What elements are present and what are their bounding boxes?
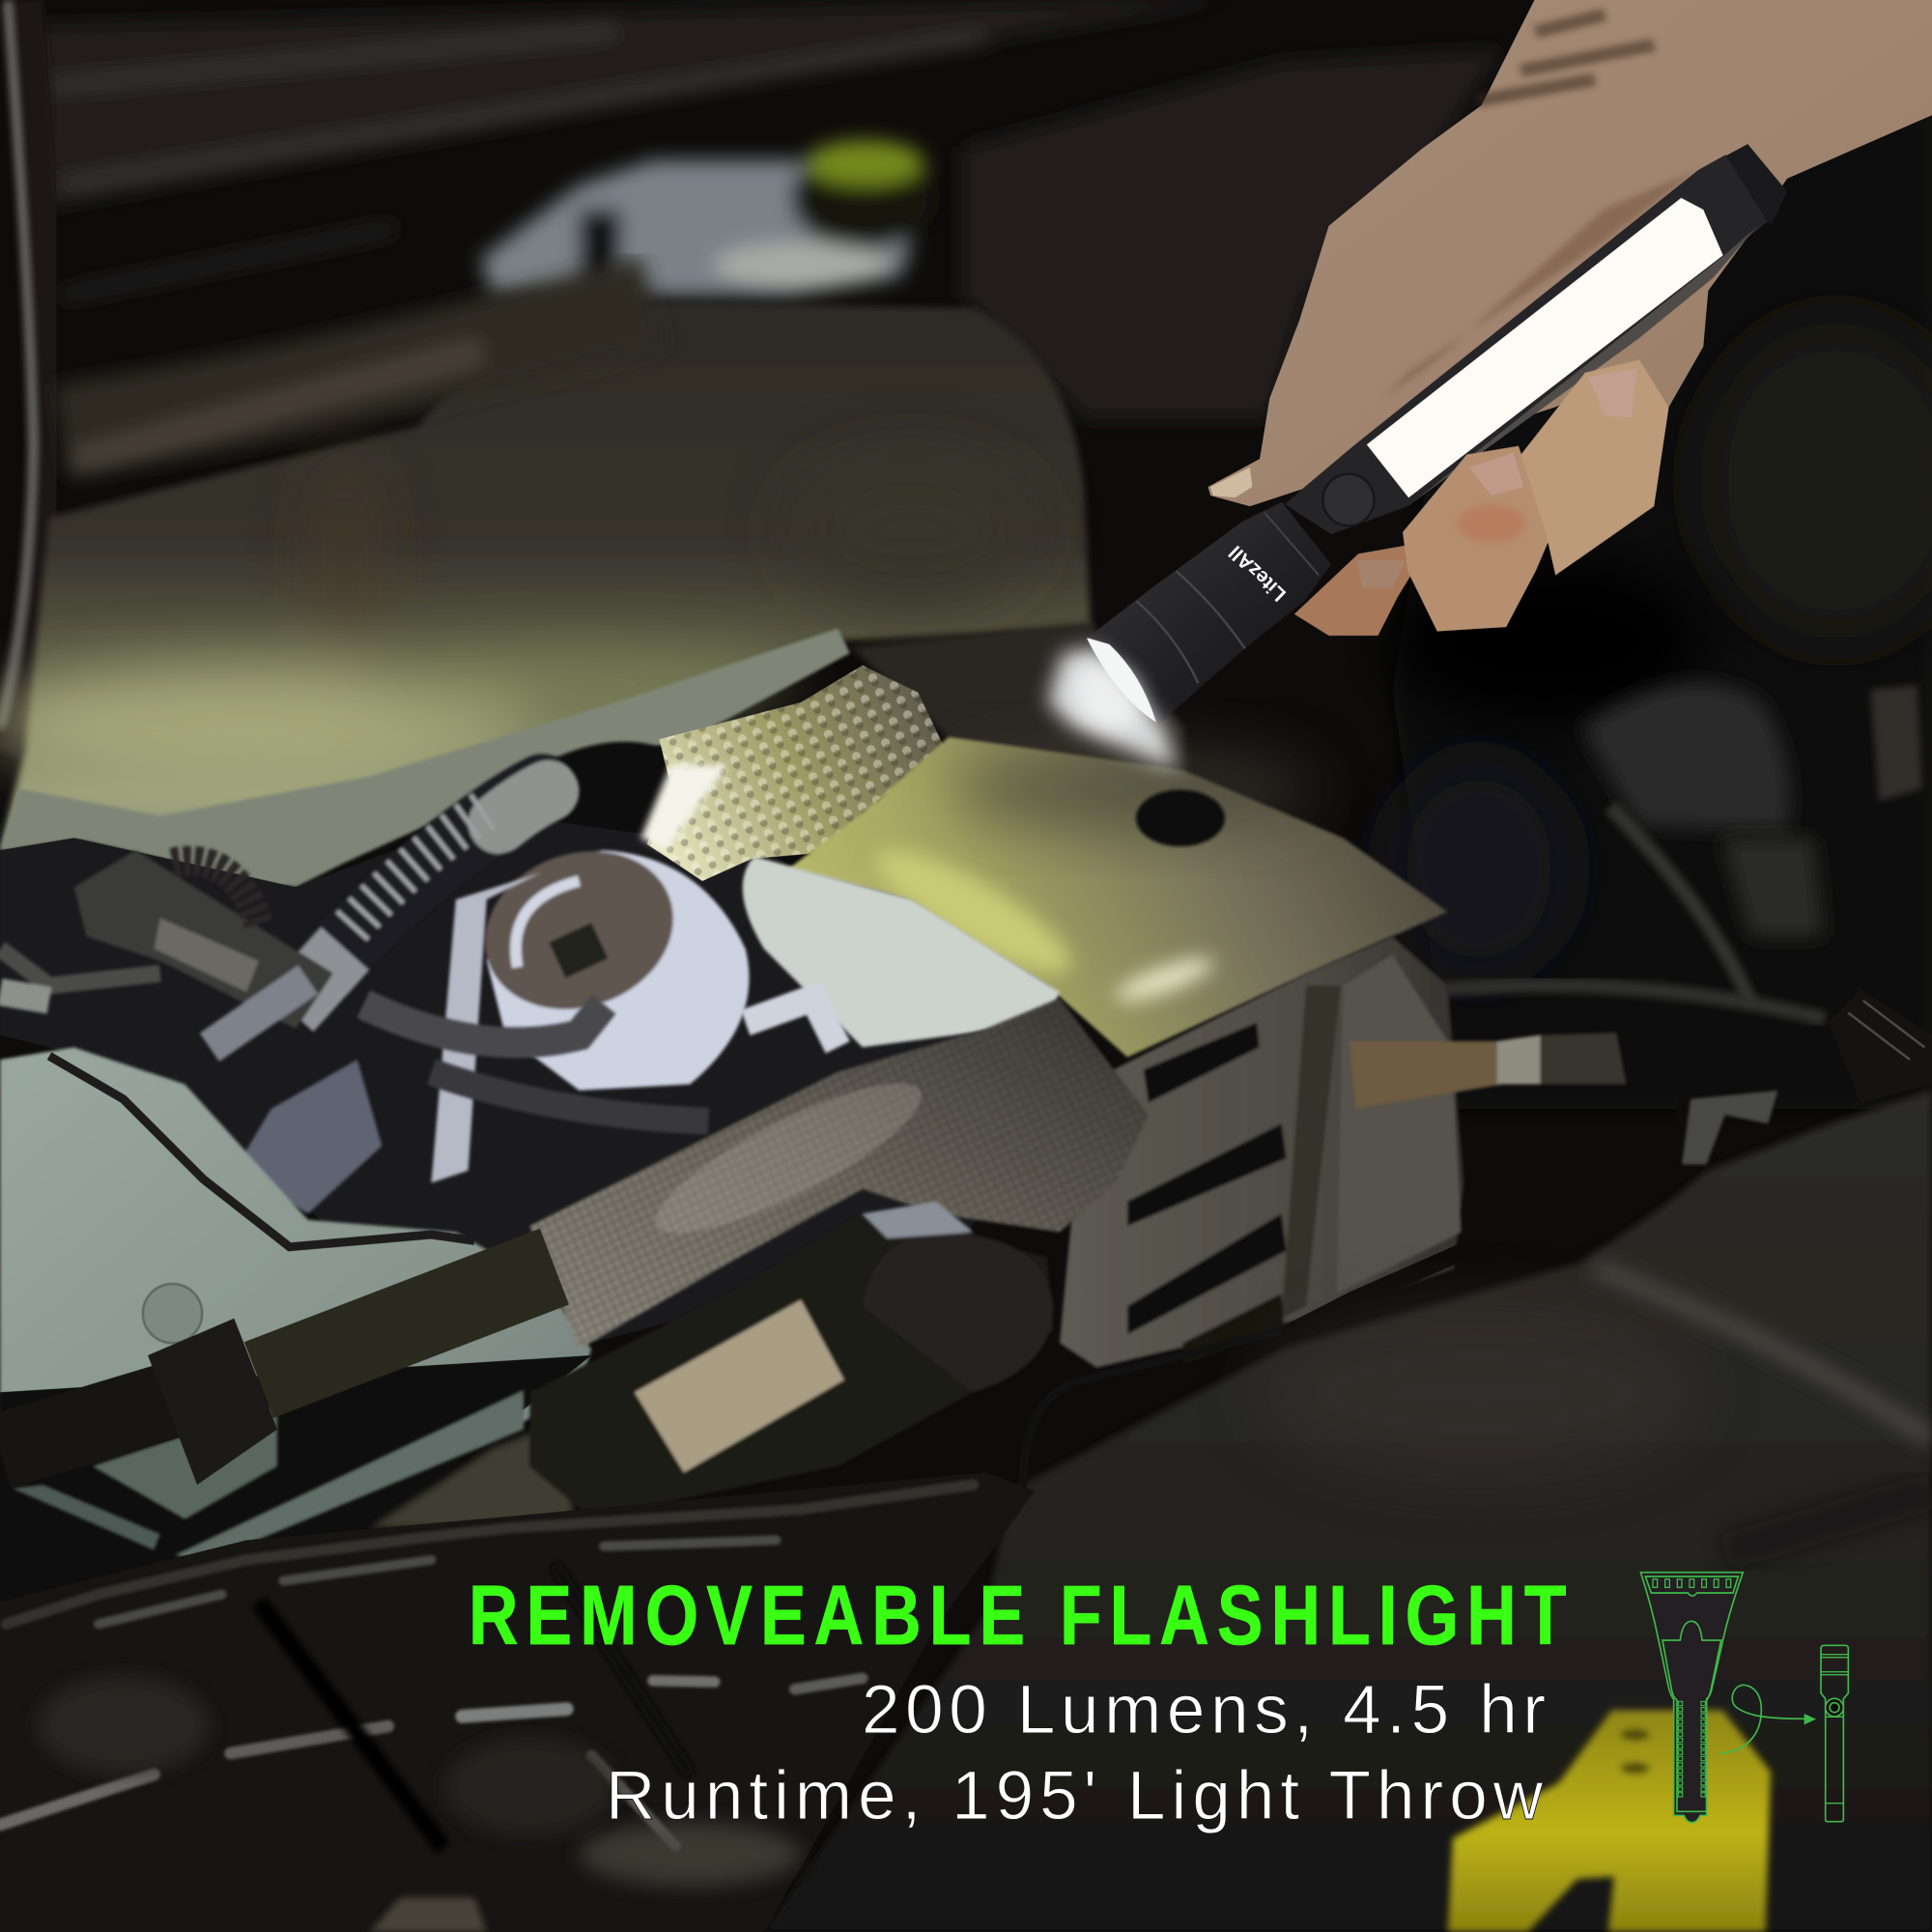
handle recess bbox=[1662, 1621, 1721, 1811]
forearm and palm bbox=[1208, 0, 1932, 506]
flashlight lens highlight bbox=[1087, 639, 1155, 722]
right background, shadowed engine parts bbox=[1387, 324, 1932, 1026]
tail cap bbox=[1716, 144, 1787, 224]
hand and flashlight bbox=[1088, 0, 1932, 724]
starter motor bbox=[529, 1202, 1054, 1518]
scraper outline bbox=[1640, 1573, 1743, 1823]
lens bbox=[1088, 638, 1156, 722]
lower right plastic shroud bbox=[764, 1091, 1932, 1932]
cover shading bbox=[0, 518, 989, 786]
brand logo: LitezAll bbox=[1225, 541, 1291, 605]
vacuum lines bbox=[363, 998, 838, 1122]
dark center cavity bbox=[0, 822, 976, 1343]
left pillar edge bbox=[0, 0, 47, 752]
dark gap under cover bbox=[554, 740, 661, 767]
grip squares bbox=[1678, 1701, 1705, 1797]
lower left dark shroud bbox=[0, 1472, 1035, 1932]
white cylinder bbox=[743, 856, 1060, 1047]
head and collar bbox=[1088, 502, 1331, 724]
air box lower shadow and strips bbox=[0, 1355, 591, 1602]
grommet bbox=[1136, 790, 1225, 846]
icon: scraper with removable flashlight bbox=[1640, 1573, 1848, 1823]
arrow curve bbox=[1720, 1685, 1804, 1753]
arrow head bbox=[1804, 1714, 1816, 1724]
finger two bbox=[1403, 446, 1550, 632]
brake fluid reservoir bbox=[480, 140, 934, 296]
alternator bbox=[1060, 936, 1463, 1368]
blade slots bbox=[1653, 1579, 1731, 1587]
bracket plate bbox=[431, 872, 542, 1182]
EGR valve bbox=[463, 826, 750, 1091]
white light panel bbox=[1367, 198, 1723, 497]
head ridges bbox=[1137, 571, 1245, 683]
palm shadow bbox=[1383, 170, 1698, 398]
yellow cap bbox=[1448, 1710, 1771, 1932]
oxygen sensor bbox=[1350, 1033, 1627, 1109]
thumb nail bbox=[1210, 468, 1252, 497]
engine cover bbox=[0, 301, 1091, 887]
valve cover upper shading bbox=[949, 744, 1319, 833]
bright glow on shield bbox=[863, 831, 1217, 1009]
black hose bbox=[0, 1266, 554, 1485]
background: upper engine bay, out of focus bbox=[37, 0, 1503, 419]
body bbox=[1285, 155, 1768, 534]
corrugated hose bbox=[290, 788, 549, 1010]
valve cover shield bbox=[788, 737, 1448, 1057]
finger three bbox=[1520, 359, 1669, 576]
power button bbox=[1322, 474, 1374, 526]
flashlight outline bbox=[1821, 1645, 1848, 1822]
scraper blade header bbox=[1645, 1577, 1738, 1596]
collar line bbox=[1264, 513, 1319, 576]
heat shield bbox=[640, 666, 947, 881]
subtext line one: 200 Lumens, 4.5 hr bbox=[862, 1672, 1546, 1748]
louvered part, right edge bbox=[1847, 999, 1925, 1061]
dark stuff behind beam bbox=[852, 620, 1185, 769]
heat sleeve bbox=[529, 998, 1149, 1350]
arm hair bbox=[1477, 14, 1654, 100]
blue lit casting bbox=[234, 1060, 382, 1213]
connector and wiring harness bbox=[0, 850, 332, 1047]
flashlight beam glow bbox=[1047, 647, 1177, 770]
subtext line two: Runtime, 195' Light Throw bbox=[606, 1758, 1544, 1834]
heading: Removeable Flashlight: REMOVEABLE FLASHLIGHT bbox=[469, 1568, 1574, 1662]
air box bbox=[0, 1047, 591, 1559]
flashlight bbox=[1088, 144, 1787, 724]
finger one bbox=[1294, 545, 1413, 636]
cover front lip bbox=[0, 629, 850, 887]
upper air hose bbox=[62, 301, 653, 462]
grip side edge bbox=[1407, 226, 1757, 506]
